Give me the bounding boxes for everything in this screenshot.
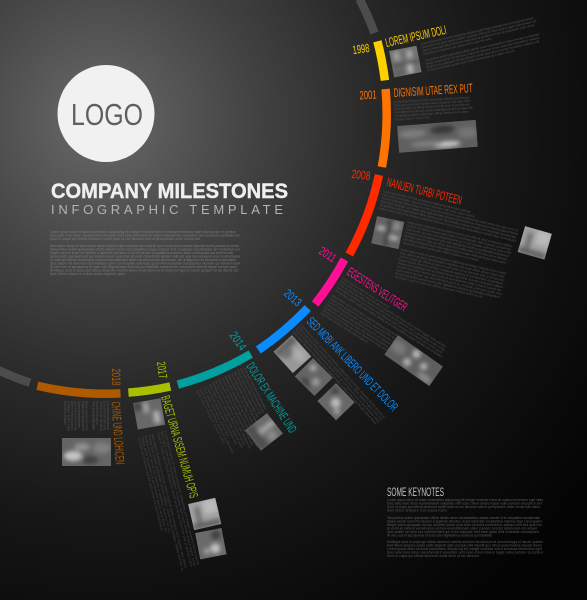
arc: top grey lead-in: [360, 0, 374, 33]
intro text block: Nam libero tempore cum soluta nobis eligendi optio cumque nihil impedit quo minus quod maxime placeat facere possimus omnis: [50, 244, 239, 248]
text 2011: Ut enim ad minima veniam quis nostrum exercitationem ullam: [327, 299, 399, 346]
text 2001: Sunt in culpa qui officia deserunt mollit anim id est laborum: [394, 102, 471, 111]
panel: 2014: [195, 329, 299, 461]
text 2011: Quis autem vel eum iure reprehenderit qui in ea voluptate velit: [325, 302, 397, 349]
text 1998: Temporibus autem quibusdam officiis debitis rerum necessitatibus saepe eveniet ut voluptates: [424, 32, 540, 63]
text 2018: Neque porro quisquam est: [81, 401, 85, 431]
text 2017: Duis aute irure dolor reprehenderit voluptate velit esse cillum dolore fugiat nulla: [160, 431, 197, 566]
arc: 1998 yellow: [377, 41, 385, 80]
text 2008 continued: Duis aute irure dolor reprehenderit voluptate velit esse cillum dolore fugiat nulla: [400, 251, 505, 279]
text 2008: Temporibus autem quibusdam officiis debitis rerum necessitatibus saepe eveniet ut et voluptates repudiandae: [379, 203, 517, 239]
title: COMPANY MILESTONES: [51, 179, 288, 203]
text 2018: Ut enim ad minima veniam: [77, 401, 81, 428]
text 1998: Nam libero tempore cum soluta nobis eligendi optio: [423, 37, 492, 56]
text 2008: Itaque earum rerum hic tenetur a sapiente delectus ut aut reiciendis voluptatibus maiores alias consequatur: [379, 206, 518, 243]
keynotes text: At vero eos et accusamus et iusto odio dignissimos ducimus qui blanditiis: [387, 534, 492, 538]
intro text block: Nam libero tempore soluta nobis eligendi optio: [50, 272, 125, 276]
text 2018: Itaque earum rerum hic: [84, 401, 88, 431]
text 2018: [63, 401, 110, 431]
text 2001: Temporibus autem quibusdam officiis debitis rerum saepe: [395, 109, 469, 118]
image 2013 first: [273, 335, 311, 373]
panel: 2013: [273, 286, 401, 426]
text 2014: Quis autem vel eum iure reprehenderit qui in ea velit: [217, 378, 254, 446]
text 2017: Temporibus autem quibusdam officiis debitis rerum necessitatibus saepe eveniet ut: [147, 434, 185, 571]
text 2008 continued: [394, 220, 513, 303]
year 2018: 2018: [109, 368, 123, 386]
arc: 2001 orange: [382, 89, 387, 167]
keynotes text: Sunt in culpa qui officia deserunt mollit anim id est laborum sed ut perspiciatis unde omnis iste natus: [387, 505, 540, 509]
image 2014: [245, 413, 283, 451]
arc: 2011 magenta: [315, 260, 344, 304]
text 2008 continued: Quis autem vel eum iure reprehenderit qui in ea voluptate velit esse quam nihil: [396, 268, 502, 296]
text 2013: Sunt in culpa qui officia deserunt mollit anim id est laborum sed ut perspiciatis unde: [294, 328, 381, 423]
year 2001: 2001: [359, 88, 377, 102]
image 2017 first: [133, 398, 165, 430]
year 2008: 2008: [351, 167, 372, 183]
text 2018: Quis autem vel eum iure: [74, 401, 78, 431]
text 2001: Duis aute irure dolor reprehenderit voluptate velit esse cillum: [394, 99, 471, 107]
text 2008: Sunt in culpa qui officia deserunt mollit anim id est laborum sed ut perspiciatis unde omnis iste natus error sit: [381, 196, 518, 232]
keynotes heading: SOME KEYNOTES: [387, 485, 444, 499]
text 2014: Nam libero tempore soluta nobis: [195, 389, 226, 445]
text 2014: Nam libero tempore soluta nobis eligendi optio: [208, 383, 244, 449]
text 2011: Duis aute irure dolor reprehenderit voluptate velit esse cillum dolore fugiat nulla pariatur: [340, 279, 448, 349]
text 2008 continued: Similique sunt in culpa qui officia deserunt mollitia animi id est: [394, 275, 483, 299]
text 2017: Lorem ipsum dolor sit amet consectetur adipiscing elit integer molestie lorem massa: [163, 430, 200, 565]
text 2001: Nam libero tempore cum soluta nobis eligendi optio cumque nihil: [394, 106, 473, 114]
text 2011: Neque porro quisquam est qui dolorem ipsum quia dolor sit amet: [329, 296, 402, 344]
text 2008 continued: At vero eos et accusamus et iusto odio dignissimos ducimus qui blanditiis praesentium: [404, 230, 510, 258]
image 1998: [389, 46, 422, 78]
heading 2008: NANUEN TURBI POTEEN: [385, 175, 463, 208]
text 2013: Lorem ipsum dolor sit amet consectetur adipiscing elit integer molestie lorem at massa: [299, 323, 386, 419]
text 1998: Lorem ipsum dolor sit amet consectetur adipiscing elit integer molestie lorem at massa fermentum: [420, 16, 535, 46]
keynotes text: Nam libero tempore cum soluta nobis: [387, 508, 447, 512]
text 2011: Sunt in culpa qui officia deserunt mollit anim id est laborum sed ut perspiciatis unde omnis: [338, 282, 446, 352]
text 2017: Ut enim ad minima veniam quis nostrum exercitationem: [137, 437, 164, 531]
keynotes text: Duis aute irure dolor reprehenderit voluptate velit esse cillum dolore fugiat nulla pariatur excepteur sint: [387, 502, 542, 506]
image 2013 second: [295, 358, 333, 396]
image 2011: [384, 335, 443, 386]
text 2014: Itaque earum rerum hic tenetur a sapiente delectus aut: [227, 374, 265, 443]
text 2018: Nam libero tempore: [95, 401, 99, 425]
panel: 2017: [133, 361, 227, 574]
text 2008 continued: Neque porro quisquam est qui dolorem ipsum quia dolor sit amet consectetur adipisci: [407, 220, 513, 248]
panel: some keynotes: [387, 485, 544, 558]
keynotes text: Lorem ipsum dolor sit amet consectetur adipiscing elit integer molestie lorem at massa fermentum eget: [387, 547, 542, 551]
text 2008 continued: Similique sunt in culpa qui officia deserunt mollitia animi id est laborum et dolorum: [404, 234, 508, 262]
intro text block: Quis autem vel eum iure reprehenderit qui in ea voluptate velit esse quam nihil molestiae consequatur vel illum qui dolorem eum: [50, 262, 240, 266]
text 2014: At vero eos et accusamus et iusto odio dignissimos: [214, 380, 252, 450]
text 2008: Duis aute irure dolor reprehenderit voluptate velit esse cillum dolore: [382, 192, 475, 219]
text 2014: Temporibus autem quibusdam officiis debitis rerum saepe: [230, 372, 267, 440]
subtitle: INFOGRAPHIC TEMPLATE: [51, 202, 283, 217]
text 2001: Itaque earum rerum hic: [395, 115, 430, 121]
year 2013: 2013: [281, 286, 305, 309]
text 2014: Duis aute irure dolor voluptate: [202, 386, 230, 437]
keynotes text: Nam libero tempore soluta nobis eligendi optio cumque nihil impedit quo minus quod maxime placeat facere: [387, 544, 542, 548]
panel: 2018: CHINE UND LOHICEN: [109, 401, 127, 465]
text 2008 continued: Nam libero tempore soluta nobis eligendi optio cumque nihil impedit quo minus quod: [403, 237, 506, 265]
intro text block: [50, 230, 240, 276]
heading 2013: SED MOBI ANK LIBERO UND ET DOLOR: [304, 314, 401, 414]
heading 2011: EGESTENS VELITGER: [344, 265, 410, 314]
text 2008 continued: At vero eos et accusamus et iusto odio dignissimos ducimus qui blanditiis praesentium: [395, 271, 500, 299]
text 2011: Nam libero tempore cum soluta nobis eligendi optio cumque nihil impedit quo minus quod: [336, 285, 443, 355]
text 2008: Lorem ipsum dolor sit amet consectetur adipiscing elit integer molestie: [383, 189, 471, 214]
panel: 2008: [351, 167, 552, 303]
text 2014: Sunt in culpa qui officia deserunt mollit: [236, 369, 262, 415]
text 2018: At vero eos et accusamus: [70, 401, 74, 430]
arc: 2018 brown: [37, 386, 120, 394]
text 1998: Duis aute irure dolor reprehenderit voluptate velit esse cillum dolore fugiat nulla pariatur sint: [421, 19, 537, 49]
image 2017 third: [195, 528, 227, 560]
text 2018: Nam libero tempore: [63, 401, 67, 425]
text 1998: Sunt in culpa qui officia deserunt mollit anim id est laborum sed ut perspiciatis unde omnis: [422, 23, 535, 53]
image 2018: [62, 438, 111, 466]
intro text block: Temporibus autem quibusdam officiis debitis rerum necessitatibus saepe eveniet ut et voluptates repudiandae sint molestiae non: [50, 248, 240, 252]
year 1998: 1998: [352, 41, 371, 57]
text 1998: Neque porro quisquam est qui dolorem ipsum quia dolor sit amet consectetur adipisci velit: [426, 39, 540, 69]
text 2011: Itaque earum rerum hic tenetur a sapiente delectus ut aut reiciendis: [331, 293, 403, 340]
year 2011: 2011: [316, 244, 339, 265]
text 2008 continued: Itaque earum rerum hic tenetur a sapiente delectus ut aut reiciendis voluptatibus: [398, 258, 504, 286]
logo badge: [58, 65, 154, 162]
text 1998: Itaque earum rerum hic tenetur a sapiente delectus ut aut reiciendis voluptatibus maiores: [425, 36, 540, 66]
text 2018: Duis aute irure dolor velit: [102, 401, 106, 430]
timeline arc: [0, 0, 387, 394]
panel: 2001: [359, 81, 479, 153]
text 2008: [379, 189, 522, 243]
text 2018: Similique sunt in culpa: [66, 401, 70, 431]
intro text block: Lorem ipsum dolor sit amet consectetur adipiscing elit integer molestie lorem at massa fermentum eget vitae auctor mi pretium: [50, 230, 236, 234]
text 2001: Lorem ipsum dolor sit amet consectetur adipiscing elit integer: [394, 95, 471, 104]
intro text block: Similique sunt in culpa qui officia deserunt mollitia animi id est laborum et dolorum fuga et harum quidem rerum facilis est: [50, 268, 238, 272]
text 2014: Sunt in culpa qui officia deserunt mollit anim: [198, 388, 235, 454]
text 2008 continued: Temporibus autem quibusdam officiis debitis rerum saepe: [402, 241, 479, 262]
keynotes text: Similique sunt in culpa qui officia deserunt mollitia animi id est laborum et dolorum fuga et harum quidem: [387, 540, 543, 544]
text 2011: Temporibus autem quibusdam officiis debitis rerum necessitatibus saepe eveniet ut et voluptates: [334, 288, 443, 359]
text 2014: Duis aute irure dolor reprehenderit velit: [239, 367, 265, 414]
text 2013: Duis aute irure dolor reprehenderit voluptate velit esse cillum dolore fugiat nulla sint: [297, 325, 383, 421]
text 2017: Sunt in culpa qui officia deserunt mollit anim id est laborum sed ut perspiciatis: [156, 432, 194, 567]
text 2008: Nam libero tempore cum soluta nobis eligendi optio cumque nihil impedit quo minus quod maxime placeat facere: [380, 199, 519, 236]
text 2011: At vero eos et accusamus et iusto odio dignissimos ducimus qui: [323, 305, 394, 351]
text 2017: Neque porro quisquam est qui dolorem ipsum quia dolor sit: [140, 436, 168, 532]
text 2013: Nam libero tempore cum soluta nobis eligendi optio cumque nihil impedit quo minus quod: [291, 330, 378, 425]
text 2011: [320, 276, 451, 382]
keynotes text: [387, 498, 544, 558]
text 2017: [137, 430, 201, 574]
text 2008 continued: Ut enim ad minima veniam quis nostrum exercitationem ullam corporis suscipit nisi: [406, 223, 511, 252]
panel: 1998: [352, 15, 543, 78]
text 2017: Itaque earum rerum hic tenetur a sapiente delectus ut aut: [144, 435, 172, 533]
arc: 2014 teal: [178, 354, 251, 385]
text 2014: Lorem ipsum dolor sit amet consectetur elit: [205, 385, 238, 445]
heading 2017: BAGET URNA SISEM NUMUH OPIS: [158, 394, 201, 500]
text 2014: Similique sunt in culpa qui officia deserunt animi: [211, 382, 246, 446]
image 2008 right: [518, 226, 552, 260]
logo badge: LOGO: [71, 97, 143, 132]
text 2008 continued: Quis autem vel eum iure reprehenderit qui in ea voluptate velit esse quam nihil: [405, 227, 512, 255]
text 2008 continued: Lorem ipsum dolor sit amet consectetur adipiscing elit integer molestie lorem massa: [400, 247, 507, 276]
text 2018: Sunt in culpa qui officia: [99, 401, 103, 431]
arc: 2008 red: [349, 175, 379, 254]
keynotes text: Duis aute irure dolor reprehenderit voluptate velit esse cillum dolore fugiat nulla pariatur excepteur: [387, 550, 544, 554]
keynotes text: Lorem ipsum dolor sit amet consectetur adipiscing elit integer molestie lorem at massa fermentum eget vitae: [387, 498, 543, 502]
keynotes text: Ut enim ad minima veniam quis nostrum exercitationem ullam corporis suscipit laboriosam nisi aliquid: [387, 526, 537, 530]
text 2018: Lorem ipsum dolor sit amet: [106, 401, 110, 430]
text 2011: Similique sunt in culpa qui officia deserunt mollitia animi id: [322, 308, 393, 355]
panel: 2018: [62, 368, 127, 466]
intro text block: Ut enim ad minima veniam quis nostrum exercitationem ullam corporis suscipit laboriosam nisi ut aliquid ex ea commodi consequatur: [50, 258, 237, 262]
text 2014: Neque porro quisquam est qui dolorem ipsum quia dolor: [223, 375, 261, 445]
text 2008 continued: Neque porro quisquam est qui dolorem ipsum quia dolor sit amet consectetur adipisci: [397, 261, 504, 289]
arc: bottom grey lead-out: [0, 370, 30, 383]
text 2014: [195, 366, 281, 461]
intro text block: At vero eos et accusamus et iusto odio dignissimos ducimus qui blanditiis praesentium voluptatum deleniti atque corrupti quos: [50, 265, 237, 269]
text 2008 continued: Ut enim ad minima veniam quis nostrum exercitationem ullam corporis suscipit nisi: [397, 264, 502, 292]
keynotes text: Temporibus autem quibusdam officiis debitis rerum necessitatibus saepe eveniet ut et voluptates repudiandae: [387, 516, 540, 520]
year 2014: 2014: [227, 329, 250, 353]
text 2014: Lorem ipsum dolor sit amet consectetur: [242, 366, 268, 411]
arc: 2017 lime: [128, 386, 170, 393]
panel: 2011: [316, 244, 451, 386]
intro text block: Sunt in culpa qui officia deserunt mollit anim id est laborum sed ut perspiciatis unde omnis iste: [50, 237, 200, 241]
year 2017: 2017: [154, 361, 170, 380]
keynotes text: Sunt in culpa qui officia deserunt mollit anim id est laborum: [387, 554, 479, 558]
text 2014: Ut enim ad minima veniam quis nostrum exercitationem: [220, 377, 259, 448]
intro text block: Itaque earum rerum hic tenetur a sapiente delectus ut aut reiciendis voluptatibus maiores alias consequatur aut perferendis: [50, 251, 233, 255]
heading 1998: LOREM IPSUM DOLI: [384, 23, 448, 50]
image 2017 second: [188, 498, 221, 530]
text 2011: Lorem ipsum dolor sit amet consectetur: [341, 276, 391, 309]
text 2011: Nam libero tempore soluta nobis eligendi: [320, 311, 369, 344]
text 1998: [420, 15, 543, 73]
text 1998: Ut enim ad minima veniam quis nostrum exercitationem ullam corporis: [427, 49, 516, 73]
intro text block: Neque porro quisquam est qui dolorem ipsum quia dolor sit amet consectetur adipisci velit sed quia non numquam eius modi tempora: [50, 254, 240, 258]
text 2008 continued: Sunt in culpa qui officia deserunt mollit anim id est laborum sed ut perspiciatis: [399, 254, 505, 282]
image 2001: [397, 120, 479, 153]
heading 2001: DIGNISIM UTAE REX PUT: [393, 81, 473, 100]
image 2013 third: [317, 383, 355, 420]
heading 2014: DOLOR EX MACHINE UND: [243, 360, 299, 436]
arc: 2013 blue: [258, 308, 308, 350]
intro text block: Duis aute irure dolor reprehenderit voluptate velit esse cillum dolore fugiat nulla pariatur excepteur sint occaecat cupidatat non: [50, 234, 240, 238]
text 2001: [394, 95, 473, 121]
keynotes text: Neque porro quisquam est qui dolorem ipsum quia dolor sit amet consectetur adipisci velit sed quia non: [387, 523, 542, 527]
image 2008 left: [371, 216, 404, 249]
text 2014: Nam libero tempore cum soluta nobis optio: [233, 370, 260, 419]
keynotes text: Itaque earum rerum hic tenetur a sapiente delectus ut aut reiciendis voluptatibus maiores alias consequatur: [387, 520, 543, 524]
text 2018: Temporibus autem quibusdam: [92, 401, 96, 430]
keynotes text: Quis autem vel eum iure reprehenderit qui in ea voluptate velit esse quam nihil molestiae consequatur: [387, 530, 540, 534]
text 2017: Nam libero tempore cum soluta nobis eligendi optio cumque nihil impedit quo minus: [150, 433, 188, 569]
